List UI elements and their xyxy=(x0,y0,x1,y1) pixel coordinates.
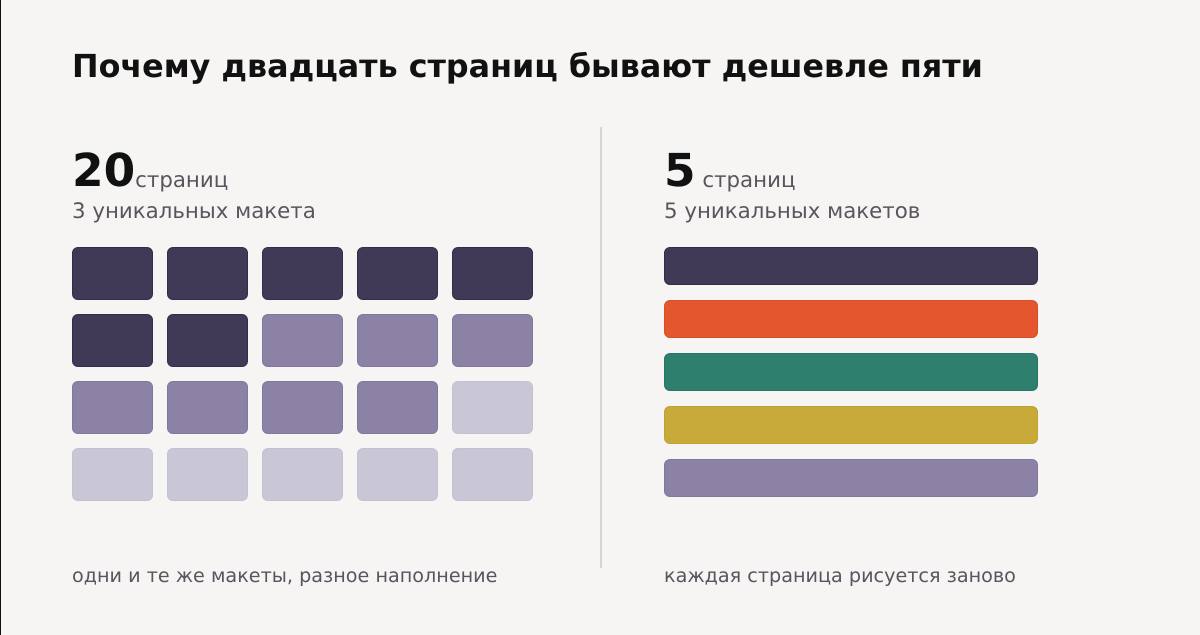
caption: each page drawn anew: каждая страница рисуется заново xyxy=(664,564,1016,587)
big number: 5 pages: 5 страниц xyxy=(664,144,795,197)
caption: same layouts: одни и те же макеты, разное наполнение xyxy=(72,564,497,587)
vertical divider xyxy=(600,127,602,568)
subtitle: 5 layouts: 5 уникальных макетов xyxy=(664,199,920,224)
title: Почему двадцать страниц бывают дешевле пяти xyxy=(72,49,983,85)
subtitle: 3 layouts: 3 уникальных макета xyxy=(72,199,316,224)
panel: 20 pages xyxy=(72,144,533,587)
page grid: 20 tiles xyxy=(72,247,533,501)
page bars: 5 unique layouts xyxy=(664,247,1038,497)
big number: 20 pages: 20страниц xyxy=(72,144,228,197)
panel: 5 pages xyxy=(664,144,1016,587)
page edge line xyxy=(0,0,1,635)
